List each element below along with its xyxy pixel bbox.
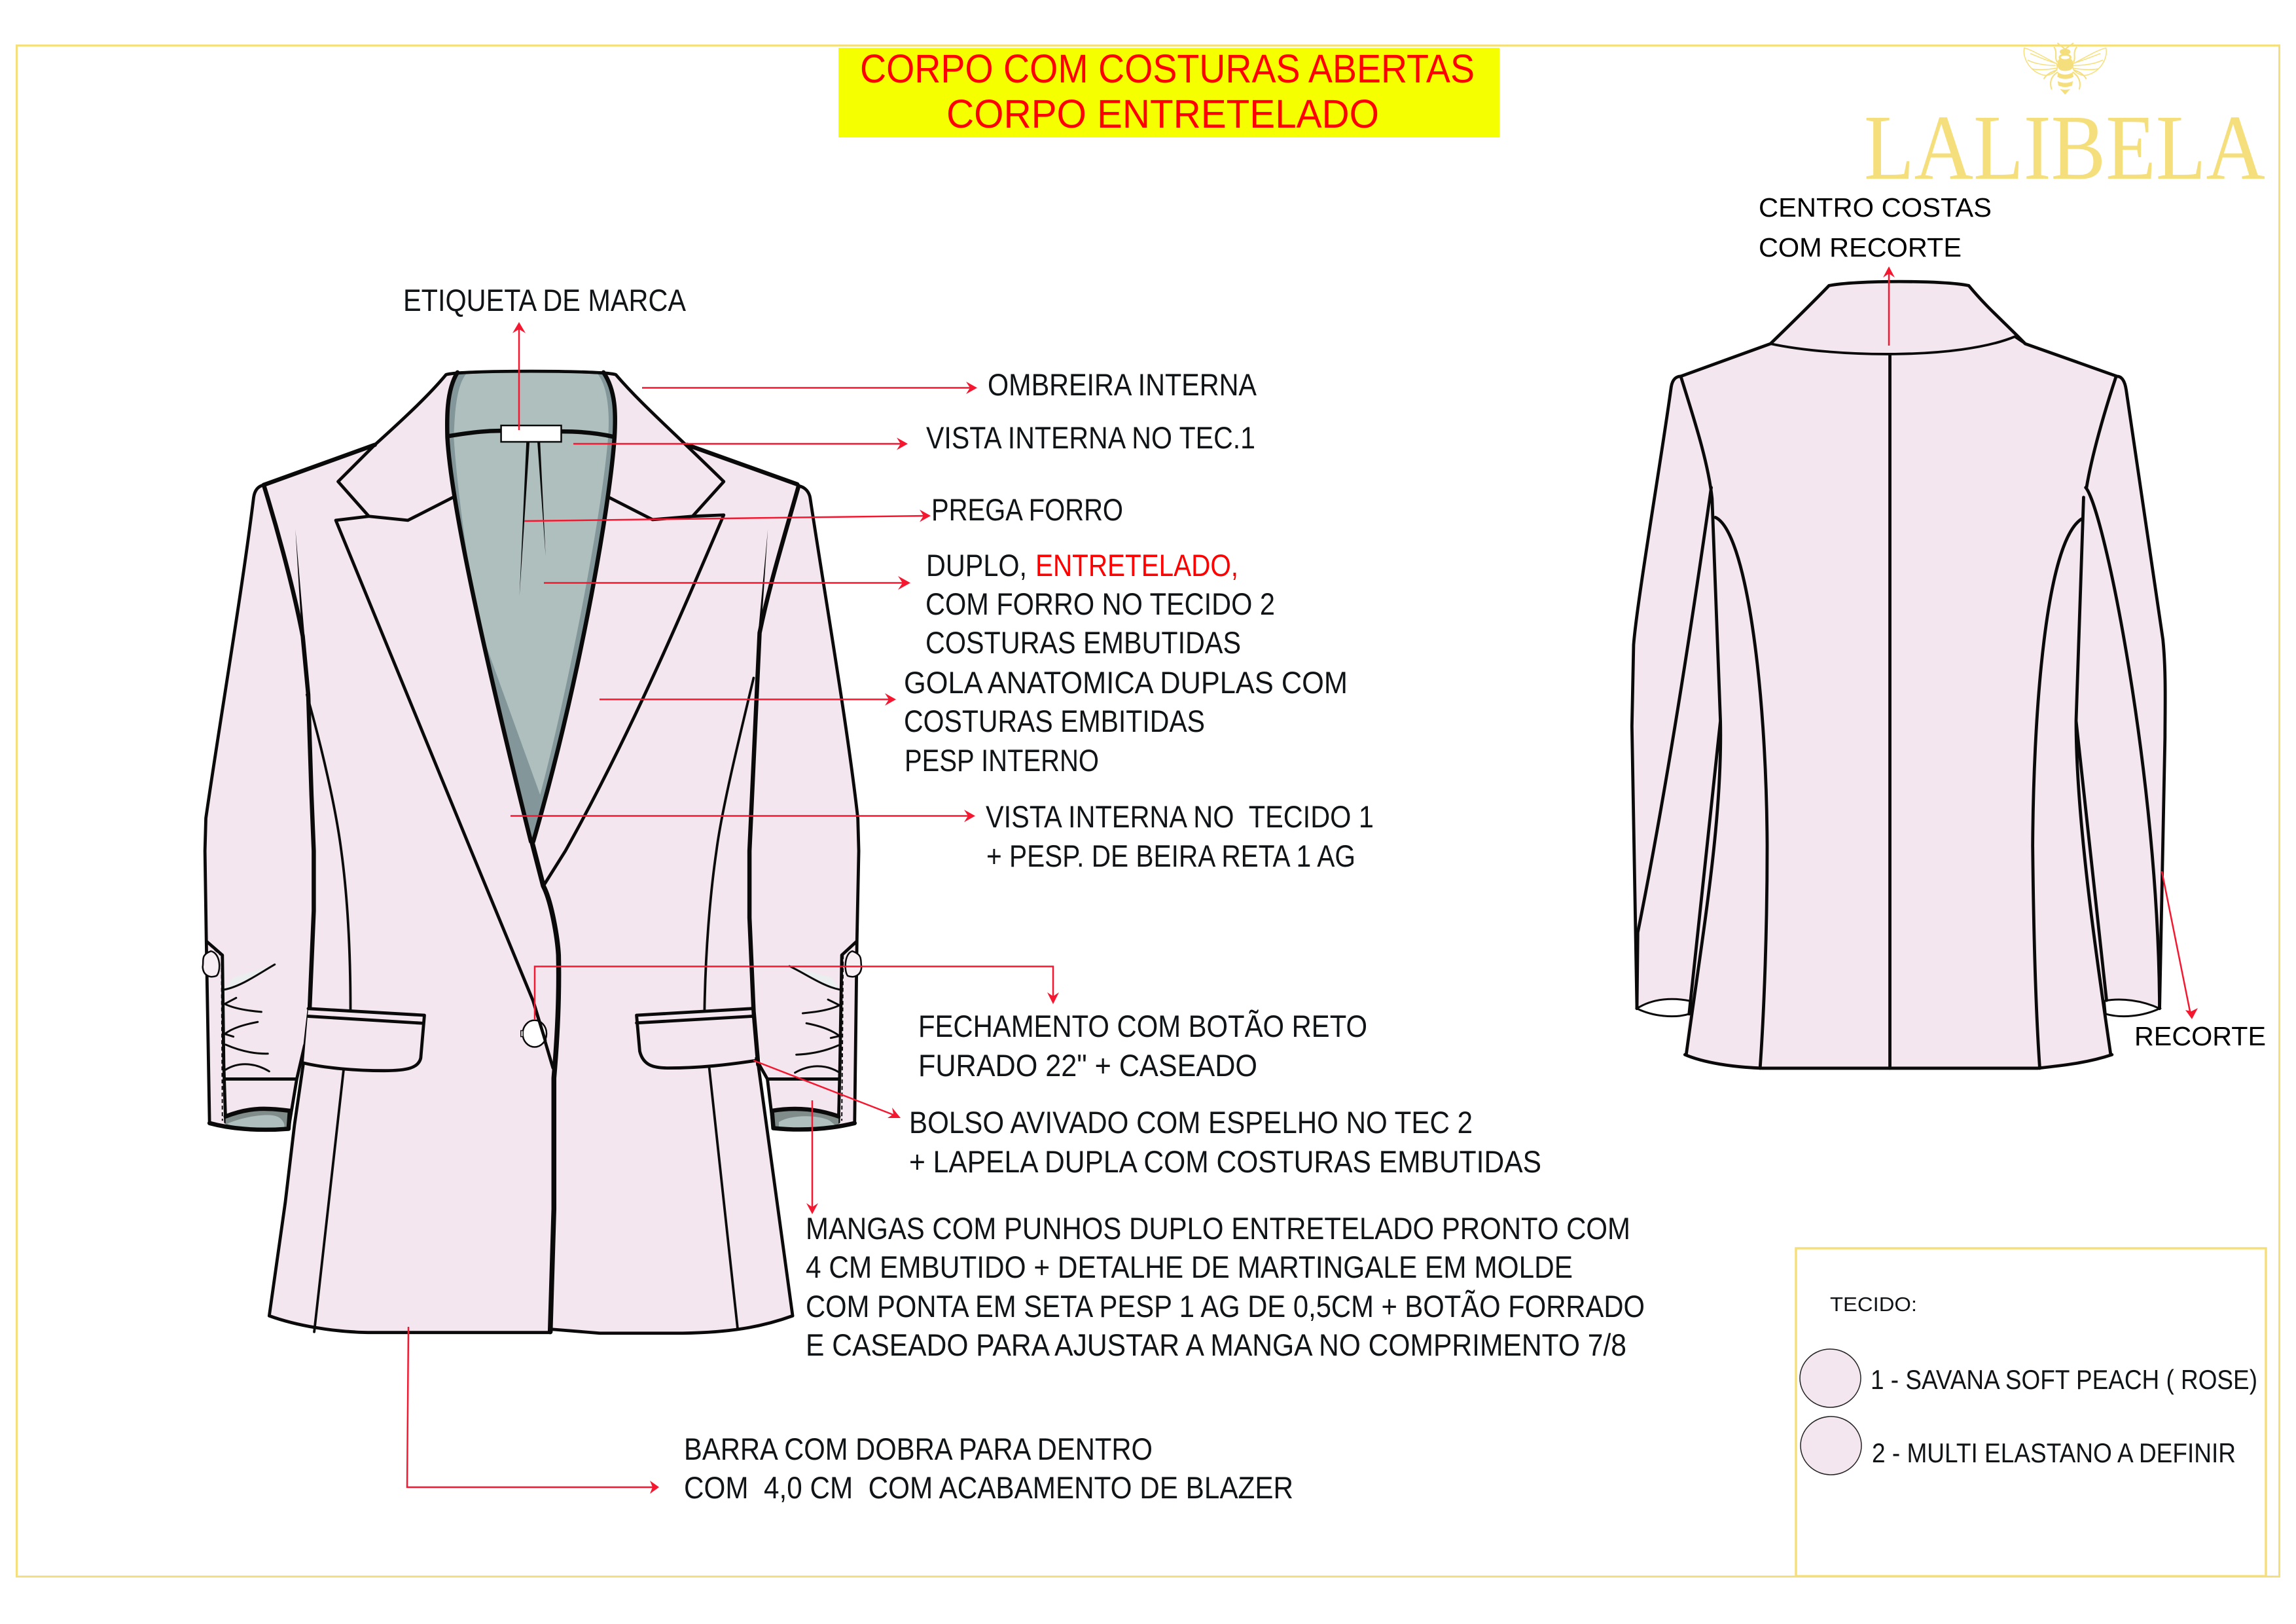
left sleeve fill xyxy=(205,485,314,1130)
swatch 2 xyxy=(1801,1416,1861,1475)
left pocket flap xyxy=(304,1009,424,1071)
label: vista interna no tecido 1 with arrow: + PESP. DE BEIRA RETA 1 AG xyxy=(986,839,1355,874)
title banner xyxy=(838,46,1499,137)
left sleeve gathers xyxy=(224,964,275,1072)
label: duplo, entretelado with arrow: COM FORRO NO TECIDO 2 xyxy=(925,587,1275,622)
label: vista interna no tec.1 with arrow xyxy=(573,421,1255,456)
label: recorte with arrow xyxy=(2134,871,2266,1051)
label: gola anatomica with arrow: PESP INTERNO xyxy=(905,744,1099,778)
label: duplo, entretelado with arrow xyxy=(544,549,1275,660)
centre back seam xyxy=(1888,355,1892,1068)
sleeve placket stitching xyxy=(209,945,852,1121)
label: barra with arrow: COM 4,0 CM COM ACABAMENTO DE BLAZER xyxy=(684,1471,1293,1506)
right cuff opening xyxy=(772,1109,855,1130)
brand label xyxy=(501,425,561,442)
right pocket flap xyxy=(637,1009,755,1068)
label: etiqueta de marca with arrow xyxy=(403,283,686,430)
label: fechamento with arrow: FECHAMENTO COM BOTÃO RETO xyxy=(918,1009,1367,1044)
right sleeve gathers xyxy=(789,966,840,1073)
icon: bee xyxy=(2024,43,2106,95)
shoulders xyxy=(264,445,797,485)
shoulder darts xyxy=(295,530,768,636)
label: centro costas com recorte with arrow: CENTRO COSTAS xyxy=(1759,192,1992,223)
label: centro costas com recorte with arrow: COM RECORTE xyxy=(1759,232,1962,262)
left armhole and sleeve seams xyxy=(1637,376,1721,1055)
back cuff openings xyxy=(1637,999,2160,1017)
body fill xyxy=(264,370,797,1333)
label: bolso avivado with arrow: BOLSO AVIVADO COM ESPELHO NO TEC 2 xyxy=(909,1106,1473,1140)
cuff buttons xyxy=(203,951,861,977)
left sleeve outline xyxy=(205,485,304,1128)
right sleeve outline xyxy=(756,486,859,1128)
back silhouette fill xyxy=(1632,281,2165,1068)
label: barra with arrow: BARRA COM DOBRA PARA DENTRO xyxy=(684,1432,1153,1467)
label: bolso avivado with arrow: + LAPELA DUPLA COM COSTURAS EMBUTIDAS xyxy=(909,1145,1541,1180)
label: fechamento with arrow xyxy=(535,966,1367,1083)
label: duplo, entretelado with arrow: DUPLO, xyxy=(926,549,1027,583)
label: vista interna no tecido 1 with arrow xyxy=(511,800,1374,874)
neck band xyxy=(448,431,613,437)
title banner: CORPO COM COSTURAS ABERTAS xyxy=(860,46,1475,91)
label: ombreira interna with arrow xyxy=(642,368,1257,403)
label: prega forro with arrow xyxy=(524,493,1123,528)
back collar seam xyxy=(1770,336,2025,354)
left cuff opening xyxy=(209,1109,290,1130)
label: centro costas com recorte with arrow xyxy=(1759,192,1992,346)
label: recorte with arrow: RECORTE xyxy=(2134,1021,2266,1051)
label: vista interna no tec.1 with arrow: VISTA INTERNA NO TEC.1 xyxy=(926,421,1255,456)
fabric 2: 2 - MULTI ELASTANO A DEFINIR xyxy=(1872,1437,2236,1468)
title banner: CORPO ENTRETELADO xyxy=(946,92,1379,136)
button xyxy=(521,1020,547,1047)
label: mangas with arrow xyxy=(806,1100,1645,1363)
armhole seams xyxy=(264,485,798,1065)
label: duplo, entretelado with arrow: ENTRETELADO, xyxy=(1035,549,1238,583)
collar and lapels xyxy=(336,371,724,1068)
label: mangas with arrow: E CASEADO PARA AJUSTAR A MANGA NO COMPRIMENTO 7/8 xyxy=(806,1328,1626,1363)
swatch 1 xyxy=(1800,1349,1861,1407)
front closure xyxy=(532,842,559,1332)
back view blazer xyxy=(1632,281,2165,1068)
lining pleat xyxy=(520,442,546,596)
label: mangas with arrow: 4 CM EMBUTIDO + DETALHE DE MARTINGALE EM MOLDE xyxy=(806,1250,1573,1285)
label: bolso avivado with arrow xyxy=(753,1060,1541,1180)
legend heading: TECIDO: xyxy=(1830,1293,1917,1316)
label: gola anatomica with arrow xyxy=(600,666,1348,778)
right armhole and sleeve seams xyxy=(2076,376,2160,1055)
label: fechamento with arrow: FURADO 22" + CASEADO xyxy=(918,1049,1257,1083)
label: mangas with arrow: COM PONTA EM SETA PESP 1 AG DE 0,5CM + BOTÃO FORRADO xyxy=(806,1289,1645,1324)
label: gola anatomica with arrow: GOLA ANATOMICA DUPLAS COM xyxy=(904,666,1348,700)
label: duplo, entretelado with arrow: COSTURAS EMBUTIDAS xyxy=(925,626,1241,660)
neck outline xyxy=(447,372,615,842)
hem and side edges xyxy=(269,1061,793,1333)
legend panel: tecido xyxy=(1796,1248,2266,1576)
back panel seams xyxy=(1715,517,2081,1068)
label: mangas with arrow: MANGAS COM PUNHOS DUPLO ENTRETELADO PRONTO COM xyxy=(806,1212,1630,1246)
logo: Lalibela bee and wordmark xyxy=(1864,43,2265,199)
front view blazer xyxy=(203,370,861,1333)
princess seams xyxy=(307,678,753,1332)
label: ombreira interna with arrow: OMBREIRA INTERNA xyxy=(988,368,1257,403)
label: barra with arrow xyxy=(407,1327,1293,1506)
back outline xyxy=(1632,281,2165,1068)
label: gola anatomica with arrow: COSTURAS EMBITIDAS xyxy=(904,704,1205,739)
label: prega forro with arrow: PREGA FORRO xyxy=(931,493,1123,528)
inner lining xyxy=(447,370,615,842)
right sleeve fill xyxy=(749,486,859,1130)
label: etiqueta de marca with arrow: ETIQUETA DE MARCA xyxy=(403,283,686,318)
label: vista interna no tecido 1 with arrow: VISTA INTERNA NO TECIDO 1 xyxy=(986,800,1374,835)
